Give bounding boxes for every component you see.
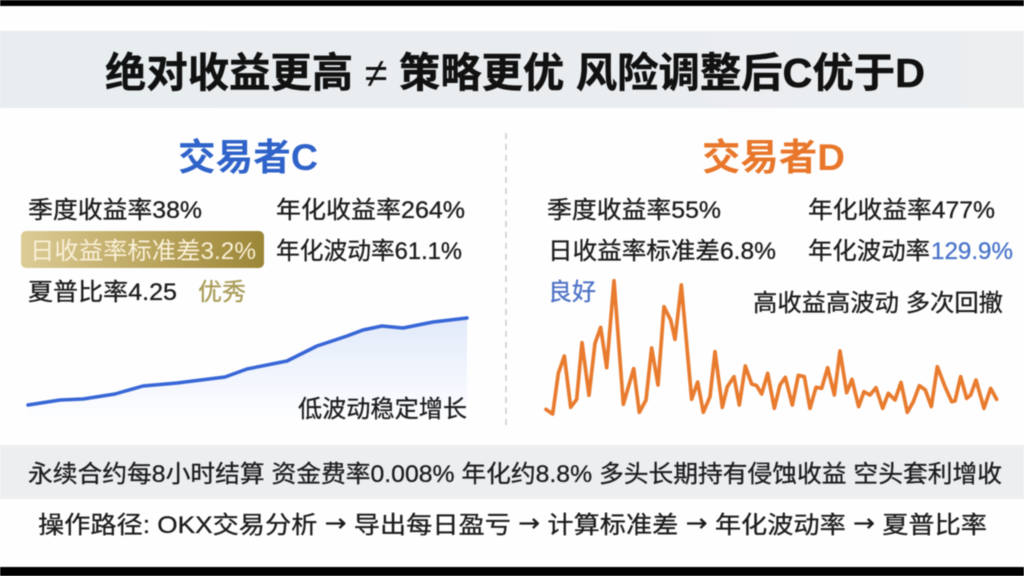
panel: trader D xyxy=(546,137,1013,414)
panel divider xyxy=(505,133,507,425)
metric: quarterly return C: 季度收益率38% xyxy=(28,197,202,224)
metric: daily return std dev D: 日收益率标准差6.8% xyxy=(548,238,776,265)
metric: annualized volatility D: 年化波动率 xyxy=(808,238,930,265)
metric: annualized return C: 年化收益率264% xyxy=(276,197,465,224)
bottom black bar xyxy=(0,567,1024,576)
heading: trader D: 交易者D xyxy=(702,137,845,178)
title band xyxy=(0,31,1024,108)
operation path note: → xyxy=(853,509,875,537)
operation path note: 计算标准差 xyxy=(547,512,678,539)
operation path note: 导出每日盈亏 xyxy=(354,512,511,539)
operation path note: → xyxy=(325,509,347,537)
highlighted metric: daily return std dev C: 日收益率标准差3.2% xyxy=(30,238,256,265)
rating: excellent: 优秀 xyxy=(198,279,246,306)
title: 绝对收益更高 ≠ 策略更优 风险调整后C优于D xyxy=(105,50,925,96)
metric: annualized volatility C: 年化波动率61.1% xyxy=(276,238,462,265)
operation path note: 年化波动率 xyxy=(715,512,846,539)
metric: annualized volatility D xyxy=(808,238,1013,265)
funding rate band xyxy=(0,445,1024,499)
operation path note: 夏普比率 xyxy=(882,512,987,539)
line chart: trader D volatile returns xyxy=(546,281,997,414)
metric: quarterly return D: 季度收益率55% xyxy=(547,197,721,224)
heading: trader C: 交易者C xyxy=(178,137,318,178)
operation path note: → xyxy=(686,509,708,537)
highlighted metric: daily return std dev C xyxy=(21,231,264,268)
chart caption D: 高收益高波动 多次回撤 xyxy=(753,290,1003,317)
metric: annualized volatility D: 129.9% xyxy=(931,238,1013,265)
funding rate note: 永续合约每8小时结算 资金费率0.008% 年化约8.8% 多头长期持有侵蚀收益 空头套利增收 xyxy=(28,461,1002,488)
top black bar xyxy=(0,0,1024,6)
operation path note: 操作路径: OKX交易分析 xyxy=(38,512,294,539)
chart caption C: 低波动稳定增长 xyxy=(298,396,467,423)
operation path note: → xyxy=(518,509,540,537)
metric: annualized return D: 年化收益率477% xyxy=(808,197,995,224)
line chart: trader C steady growth xyxy=(28,318,467,425)
panel: trader C xyxy=(21,137,467,425)
metric: Sharpe rating good: 良好 xyxy=(548,279,596,306)
metric: Sharpe ratio C: 夏普比率4.25 xyxy=(28,279,177,306)
